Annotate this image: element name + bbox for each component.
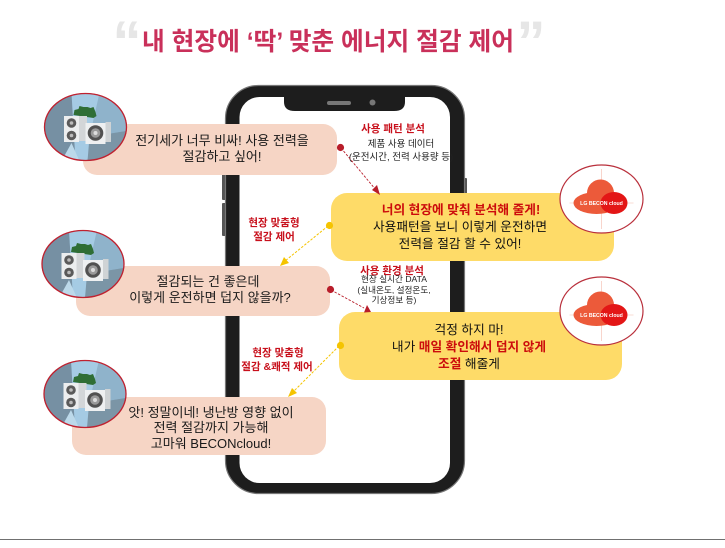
chat bubble: BECON reassurance: 조절 해줄게	[438, 357, 500, 371]
annotation: tailored saving control	[248, 216, 300, 243]
avatar: outdoor unit 2	[42, 230, 124, 298]
avatar: outdoor unit 3	[44, 360, 126, 428]
chat bubble: BECON analysis: 너의 현장에 맞춰 분석해 줄게!	[382, 202, 540, 217]
flow arrow: tailored saving control	[280, 222, 333, 266]
annotation: environment analysis: 사용 환경 분석	[360, 264, 424, 277]
annotation: usage pattern analysis: 제품 사용 데이터	[368, 139, 434, 150]
decorative opening quote mark: “	[112, 10, 142, 75]
annotation: tailored comfort saving control: 절감 &쾌적 제어	[241, 360, 313, 373]
footer rule	[0, 539, 725, 540]
smartphone illustration	[222, 86, 467, 494]
chat bubble: BECON reassurance: 걱정 하지 마!	[435, 323, 503, 337]
chat bubble: user thanks: 앗! 정말이네! 냉난방 영향 없이	[128, 405, 294, 420]
logo badge: LG BECON cloud 1	[560, 165, 643, 233]
annotation: environment analysis: (실내온도, 설정온도,	[357, 285, 431, 295]
logo badge: LG BECON cloud 1: LG BECON cloud	[580, 201, 623, 207]
annotation: environment analysis: 기상정보 등)	[372, 295, 417, 305]
logo badge: LG BECON cloud 2: LG BECON cloud	[580, 313, 623, 319]
chat bubble: comfort worry: 절감되는 건 좋은데	[157, 274, 259, 289]
chat bubble: BECON analysis	[331, 193, 614, 261]
decorative closing quote mark: ”	[516, 10, 546, 75]
chat bubble: comfort worry: 이렇게 운전하면 덥지 않을까?	[129, 290, 291, 305]
annotation: environment analysis: 현장 실시간 DATA	[361, 274, 427, 284]
annotation: environment analysis	[357, 264, 431, 305]
annotation: usage pattern analysis: (운전시간, 전력 사용량 등)	[349, 151, 453, 163]
flow arrow: pattern analysis	[337, 144, 380, 195]
annotation: usage pattern analysis: 사용 패턴 분석	[361, 122, 425, 135]
chat bubble: user thanks: 전력 절감까지 가능해	[154, 420, 268, 435]
chat bubble: comfort worry	[76, 266, 330, 316]
flow arrow: comfort saving control	[288, 342, 344, 397]
chat bubble: user complaint: 절감하고 싶어!	[183, 149, 261, 164]
annotation: usage pattern analysis	[349, 122, 453, 163]
chat bubble: user thanks	[72, 397, 326, 455]
chat bubble: BECON reassurance	[339, 312, 622, 380]
chat bubble: user complaint: 전기세가 너무 비싸! 사용 전력을	[135, 133, 309, 148]
chat bubble: user thanks: 고마워 BECONcloud!	[151, 436, 271, 451]
chat bubble: BECON analysis: 사용패턴을 보니 이렇게 운전하면	[373, 220, 547, 234]
title: 내 현장에 ‘딱’ 맞춘 에너지 절감 제어	[142, 28, 514, 56]
chat bubble: BECON analysis: 전력을 절감 할 수 있어!	[399, 237, 521, 251]
avatar: outdoor unit 1	[44, 93, 127, 161]
logo badge: LG BECON cloud 2	[560, 277, 643, 345]
annotation: tailored comfort saving control	[241, 346, 313, 373]
annotation: tailored comfort saving control: 현장 맞춤형	[252, 346, 304, 359]
chat bubble: user complaint	[83, 124, 337, 175]
annotation: tailored saving control: 절감 제어	[253, 230, 295, 243]
annotation: tailored saving control: 현장 맞춤형	[248, 216, 300, 229]
chat bubble: BECON reassurance: 내가 매일 확인해서 덥지 않게	[392, 339, 546, 354]
flow arrow: environment analysis	[327, 286, 371, 312]
